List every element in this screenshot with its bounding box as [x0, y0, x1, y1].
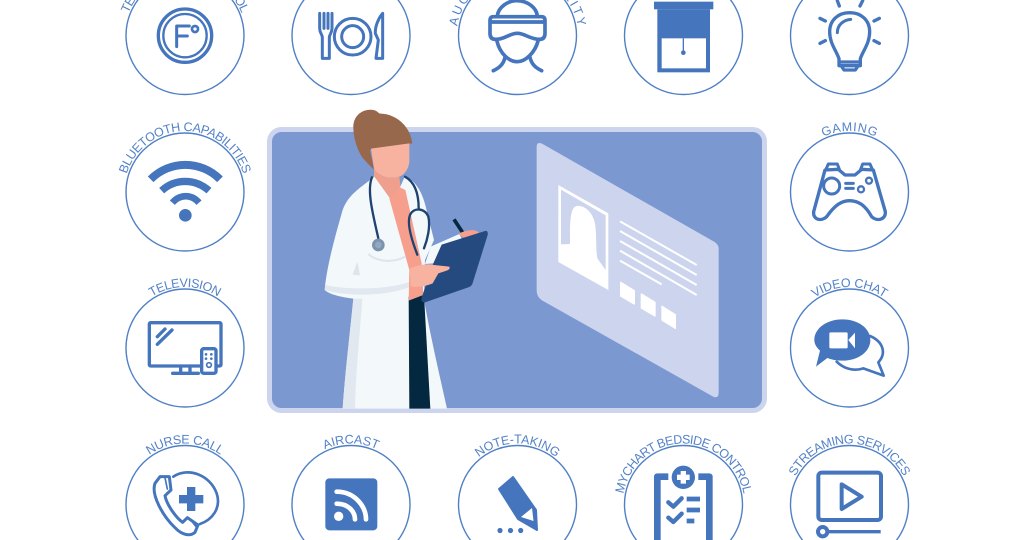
icon: Fahrenheit dial — [158, 9, 212, 62]
record text lines — [620, 221, 697, 295]
icon group: window shades — [624, 0, 742, 94]
label: MYCHART BEDSIDE CONTROL — [615, 434, 751, 494]
trousers — [409, 295, 430, 409]
doctor figure — [325, 110, 488, 409]
icon: wireless signal — [151, 165, 220, 222]
circle — [790, 446, 908, 540]
label: VIDEO CHAT — [810, 278, 888, 296]
circle — [624, 446, 742, 540]
pen — [454, 219, 465, 237]
icon: chat bubbles with camera — [814, 319, 884, 376]
icon: telephone with medical cross — [154, 472, 218, 535]
icon group: nurse call — [125, 434, 245, 540]
circle — [458, 0, 576, 94]
circle — [790, 0, 908, 94]
icon group: television — [125, 278, 245, 408]
stethoscope — [370, 177, 429, 255]
coat shading — [343, 299, 362, 409]
icon group: meals — [292, 0, 410, 94]
icon group: augmented reality — [450, 0, 586, 96]
circle — [790, 133, 908, 251]
icon group: temperature control — [120, 0, 248, 96]
icon group: note-taking — [458, 434, 578, 540]
circle — [126, 446, 244, 540]
patient photo — [558, 185, 608, 290]
icon: light bulb — [820, 1, 879, 70]
neck — [374, 168, 401, 198]
icon: game controller — [814, 164, 885, 219]
icon: video player — [818, 473, 881, 536]
circle — [126, 289, 244, 407]
icon: broadcast feed — [325, 478, 377, 530]
icon: VR headset — [490, 1, 545, 71]
icon: medical clipboard checklist — [657, 466, 709, 540]
label: NURSE CALL — [146, 434, 222, 455]
stethoscope chest piece — [372, 239, 385, 251]
shirt — [389, 187, 423, 301]
clipboard — [421, 231, 488, 302]
sleeve shading — [325, 282, 411, 295]
record buttons — [621, 282, 675, 328]
label: TELEVISION — [148, 278, 222, 296]
writing hand — [410, 264, 450, 287]
white coat — [325, 176, 447, 409]
icon: window blind — [654, 2, 713, 72]
circle — [292, 446, 410, 540]
circle — [624, 0, 742, 94]
icon: pencil with dotted line — [497, 477, 537, 533]
label: BLUETOOTH CAPABILITIES — [118, 122, 251, 173]
label: STREAMING SERVICES — [789, 434, 910, 475]
circle — [790, 289, 908, 407]
panel: central illustration background — [270, 130, 764, 410]
icon group: mychart bedside control — [615, 434, 751, 540]
circle — [458, 446, 576, 540]
paper — [425, 234, 462, 264]
screen card — [537, 143, 719, 397]
circle — [126, 133, 244, 251]
upper hand — [458, 230, 479, 240]
virtual patient record screen — [537, 143, 719, 397]
label: NOTE-TAKING — [474, 434, 560, 456]
hair — [353, 110, 412, 169]
icon: television and remote — [149, 323, 221, 373]
label: GAMING — [822, 122, 877, 136]
label: AIRCAST — [324, 434, 380, 450]
icon group: lighting — [790, 0, 908, 94]
icon group: bluetooth capabilities — [118, 122, 251, 252]
face — [371, 143, 409, 178]
circle — [292, 0, 410, 94]
icon: fork, plate and knife — [320, 13, 383, 58]
icon group: aircast — [291, 434, 411, 540]
coat fold — [353, 262, 360, 275]
icon group: video chat — [790, 278, 910, 408]
icon group: gaming — [790, 122, 910, 252]
pocket — [368, 254, 405, 261]
icon group: streaming services — [789, 434, 910, 540]
circle — [126, 0, 244, 94]
